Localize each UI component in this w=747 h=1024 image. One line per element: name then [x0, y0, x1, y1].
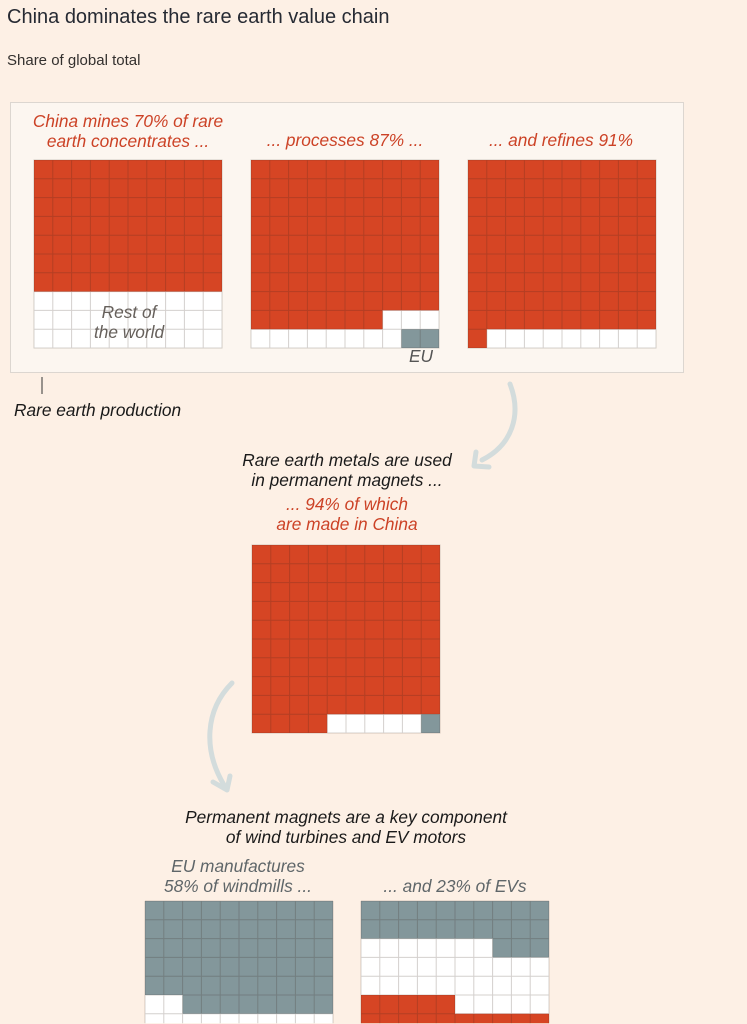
heading line 2: are made in China	[276, 514, 418, 534]
heading line 2: earth concentrates ...	[47, 131, 209, 151]
grid: magnets 94%	[252, 545, 440, 733]
text: components: Permanent magnets are a key component	[185, 807, 508, 827]
arrow: to magnets	[474, 384, 515, 467]
grid: processes 87%	[251, 160, 439, 348]
heading line 2: 58% of windmills ...	[164, 876, 312, 896]
text line 2: in permanent magnets ...	[251, 470, 443, 490]
heading: windmills: EU manufactures	[171, 856, 305, 876]
grid: windmills 58%	[145, 901, 333, 1023]
heading: processes: ... processes 87% ...	[267, 130, 423, 150]
heading: 94%: ... 94% of which	[286, 494, 408, 514]
heading: refines: ... and refines 91%	[489, 130, 633, 150]
title: China dominates the rare earth value chain	[7, 6, 389, 28]
grid: refines 91%	[468, 160, 656, 348]
text line 2: of wind turbines and EV motors	[226, 827, 466, 847]
heading: mines: China mines 70% of rare	[33, 111, 223, 131]
label line 2: the world	[94, 322, 165, 342]
heading: EVs: ... and 23% of EVs	[383, 876, 527, 896]
arrow: to turbines	[210, 683, 232, 790]
label: rare earth production: Rare earth production	[14, 400, 181, 420]
grid: EVs 23%	[361, 901, 549, 1023]
label: rest of the world: Rest of	[102, 302, 159, 322]
text: magnets: Rare earth metals are used	[242, 450, 453, 470]
grid: mines 70%	[34, 160, 222, 348]
subtitle: Share of global total	[7, 52, 140, 69]
panel: rare earth production	[10, 102, 684, 372]
label: EU: EU	[409, 346, 434, 366]
